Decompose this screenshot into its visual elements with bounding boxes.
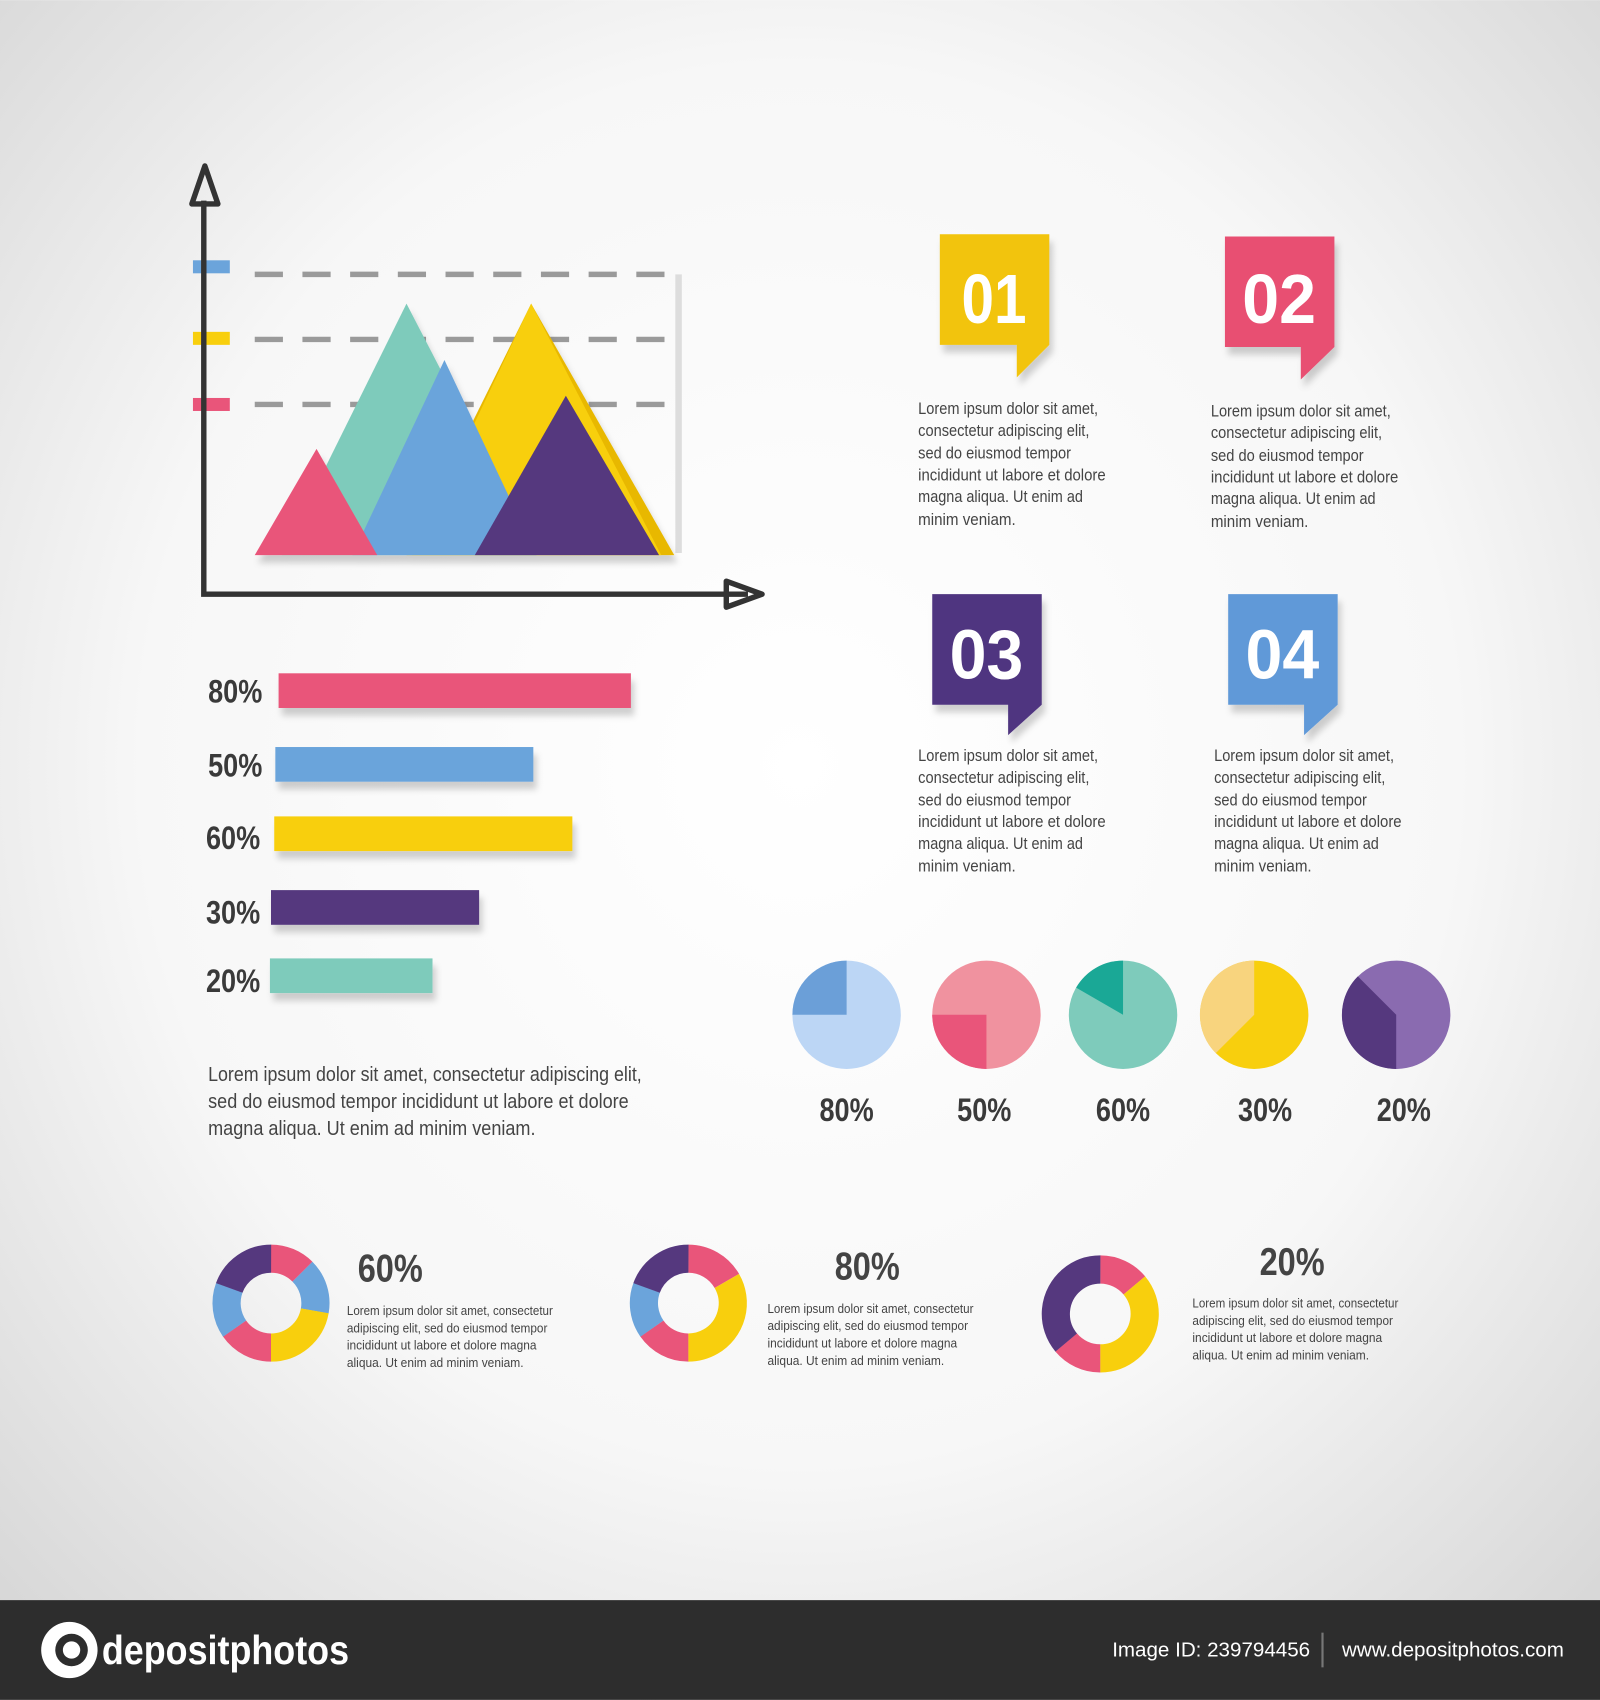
donut 3 text <box>1192 1241 1399 1362</box>
tag texts: Lorem ipsum dolor sit amet, <box>918 747 1098 765</box>
donut 1 text <box>347 1247 553 1370</box>
paragraph <box>208 1063 642 1140</box>
area chart <box>192 166 762 607</box>
logo icon <box>41 1622 98 1678</box>
tag texts: sed do eiusmod tempor <box>1211 447 1364 465</box>
bar chart: 50% <box>208 747 262 783</box>
tag texts: incididunt ut labore et dolore <box>1211 469 1398 487</box>
tag texts <box>918 400 1402 876</box>
pie charts: 30% <box>1238 1092 1292 1128</box>
tag texts: incididunt ut labore et dolore <box>918 813 1106 831</box>
bar chart: 80% <box>208 674 262 710</box>
tag texts: minim veniam. <box>918 511 1016 529</box>
tag texts: Lorem ipsum dolor sit amet, <box>1214 747 1394 765</box>
markers <box>193 260 230 273</box>
tag 01 <box>940 234 1049 377</box>
bar chart: 60% <box>206 820 260 856</box>
tag texts: magna aliqua. Ut enim ad <box>918 835 1083 853</box>
tag texts: incididunt ut labore et dolore <box>1214 813 1402 831</box>
tag texts: sed do eiusmod tempor <box>1214 792 1367 810</box>
dashed lines <box>255 274 679 404</box>
donut 3 text: incididunt ut labore et dolore magna <box>1192 1330 1383 1345</box>
donut 1 text: 60% <box>358 1247 423 1290</box>
donut 2 <box>626 1241 750 1365</box>
footer bar: Image ID: 239794456 <box>1112 1639 1310 1662</box>
donut 1 text: incididunt ut labore et dolore magna <box>347 1338 537 1353</box>
donut 2 text: incididunt ut labore et dolore magna <box>767 1336 958 1351</box>
donut 3 <box>1038 1251 1163 1377</box>
triangles <box>255 304 674 555</box>
paragraph: magna aliqua. Ut enim ad minim veniam. <box>208 1117 536 1140</box>
donut 2 text <box>767 1245 974 1368</box>
tag texts: magna aliqua. Ut enim ad <box>1214 835 1379 853</box>
tag texts: Lorem ipsum dolor sit amet, <box>1211 402 1391 420</box>
tag texts: Lorem ipsum dolor sit amet, <box>918 400 1098 418</box>
donut 3 text: 20% <box>1260 1241 1325 1284</box>
tag 02: 02 <box>1242 260 1316 338</box>
footer bar: www.depositphotos.com <box>1341 1639 1564 1662</box>
tag texts: minim veniam. <box>1211 513 1308 531</box>
donut 1 text: adipiscing elit, sed do eiusmod tempor <box>347 1320 548 1335</box>
tag 04 <box>1228 594 1338 735</box>
tag texts: consectetur adipiscing elit, <box>918 769 1089 787</box>
bar chart: 30% <box>206 895 260 931</box>
tag texts: consectetur adipiscing elit, <box>1211 424 1382 442</box>
paragraph: sed do eiusmod tempor incididunt ut labore et dolore <box>208 1090 629 1113</box>
donut 3 text: adipiscing elit, sed do eiusmod tempor <box>1192 1313 1394 1328</box>
pie charts <box>792 961 1450 1128</box>
footer bar <box>0 1600 1600 1700</box>
donut 2 text: aliqua. Ut enim ad minim veniam. <box>767 1353 944 1368</box>
tag texts: minim veniam. <box>1214 858 1312 876</box>
pie charts: 60% <box>1096 1092 1150 1128</box>
donut 2 text: 80% <box>835 1245 900 1288</box>
donut 3 text: Lorem ipsum dolor sit amet, consectetur <box>1192 1295 1399 1310</box>
paragraph: Lorem ipsum dolor sit amet, consectetur adipiscing elit, <box>208 1063 642 1086</box>
donut 3 text: aliqua. Ut enim ad minim veniam. <box>1192 1347 1369 1362</box>
tag texts: sed do eiusmod tempor <box>918 445 1072 463</box>
axes <box>192 166 762 607</box>
pie charts: 20% <box>1377 1092 1431 1128</box>
tag 04: 04 <box>1246 616 1320 694</box>
tag texts: incididunt ut labore et dolore <box>918 466 1106 484</box>
tag 03 <box>932 594 1042 735</box>
tag texts: consectetur adipiscing elit, <box>1214 769 1385 787</box>
chart box edge <box>676 274 682 553</box>
bar chart <box>206 673 631 999</box>
tag 01: 01 <box>962 260 1027 338</box>
donut 2 text: adipiscing elit, sed do eiusmod tempor <box>767 1318 969 1333</box>
tag 02 <box>1225 236 1334 380</box>
donut 1 <box>208 1240 334 1366</box>
tag texts: minim veniam. <box>918 858 1016 876</box>
footer bar: depositphotos <box>102 1627 349 1673</box>
bar chart: 20% <box>206 963 260 999</box>
tag texts: magna aliqua. Ut enim ad <box>1211 490 1376 508</box>
donut 1 text: aliqua. Ut enim ad minim veniam. <box>347 1355 524 1370</box>
donut 1 text: Lorem ipsum dolor sit amet, consectetur <box>347 1303 553 1318</box>
tag 03: 03 <box>950 616 1023 694</box>
pie charts: 50% <box>957 1092 1011 1128</box>
donut 2 text: Lorem ipsum dolor sit amet, consectetur <box>767 1301 974 1316</box>
tag texts: magna aliqua. Ut enim ad <box>918 488 1083 506</box>
tag texts: consectetur adipiscing elit, <box>918 422 1089 440</box>
pie charts: 80% <box>820 1092 874 1128</box>
tag texts: sed do eiusmod tempor <box>918 792 1072 810</box>
